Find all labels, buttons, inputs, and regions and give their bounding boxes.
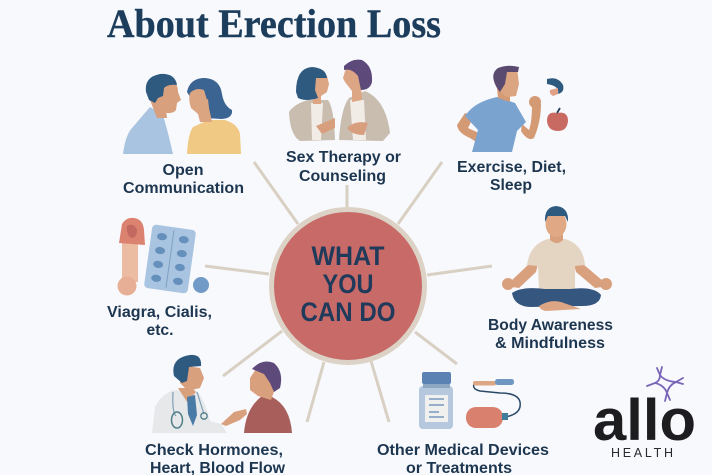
label: other medical devices or treatments: Other Medical Devices [377, 442, 549, 459]
spokes radiating from the centre circle [205, 162, 492, 422]
logo: allo health: HEALTH [611, 446, 673, 460]
label: sex therapy or counseling: Sex Therapy or [286, 149, 401, 166]
centre circle: what you can do [272, 210, 424, 362]
label: exercise diet sleep [457, 159, 566, 194]
label: sex therapy or counseling: Counseling [299, 168, 386, 185]
icon: apple [547, 108, 568, 131]
label: open communication: Communication [123, 180, 244, 197]
label: body awareness and mindfulness: Body Awareness [488, 317, 613, 334]
label: viagra cialis etc: Viagra, Cialis, [107, 304, 212, 321]
icon: medicine bottle and pump [419, 372, 520, 429]
centre circle: what you can do: YOU [322, 269, 374, 299]
label: exercise diet sleep: Sleep [490, 177, 532, 194]
label: sex therapy or counseling [286, 149, 401, 185]
icon: doctor and patient [152, 355, 292, 433]
centre circle: what you can do: CAN DO [300, 297, 396, 327]
label: check hormones heart blood flow: Check Hormones, [145, 442, 283, 459]
label: body awareness and mindfulness [488, 317, 613, 352]
label: body awareness and mindfulness: & Mindfulness [495, 335, 605, 352]
centre circle: what you can do: WHAT [312, 241, 384, 271]
label: exercise diet sleep: Exercise, Diet, [457, 159, 566, 176]
icon: pump device and pills [118, 218, 209, 296]
label: viagra cialis etc: etc. [146, 322, 174, 339]
logo: allo health [593, 367, 696, 460]
label: check hormones heart blood flow [145, 442, 286, 475]
icon: therapist and client [289, 60, 390, 141]
label: open communication [123, 162, 244, 197]
label: open communication: Open [162, 162, 204, 179]
icon: couple talking [123, 74, 241, 154]
logo mark: purple neuron [647, 367, 683, 401]
icon: exercise and food [457, 66, 568, 152]
logo: allo health: allo [593, 388, 696, 453]
title: About Erection Loss [107, 1, 441, 46]
label: viagra cialis etc [107, 304, 212, 339]
label: other medical devices or treatments [377, 442, 549, 475]
icon: meditating person [502, 206, 612, 311]
